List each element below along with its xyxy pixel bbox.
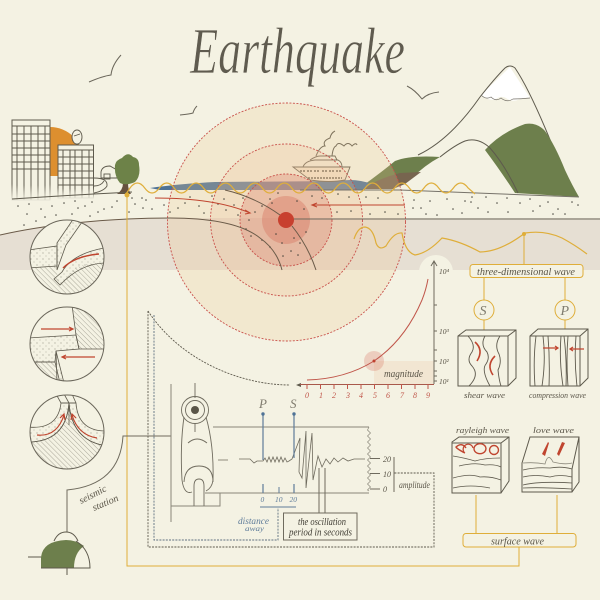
distance scale: 10 bbox=[275, 495, 283, 504]
amplitude scale: 0 bbox=[383, 485, 387, 494]
seismic waves bbox=[126, 183, 587, 255]
ground dots bbox=[18, 193, 578, 256]
magnitude curve bbox=[307, 279, 428, 380]
crust lines bbox=[0, 190, 600, 270]
birds bbox=[89, 55, 439, 115]
distance away label: distance bbox=[238, 517, 269, 527]
amplitude scale bbox=[370, 455, 430, 494]
S wave badge bbox=[474, 300, 494, 320]
snow peak bbox=[481, 67, 530, 101]
x-axis numbers bbox=[305, 391, 430, 400]
building: short bbox=[58, 145, 94, 198]
surface wave label bbox=[463, 534, 576, 548]
S wave badge: S bbox=[480, 304, 486, 319]
magnitude box bbox=[374, 361, 434, 384]
label: shear wave: shear wave bbox=[464, 390, 505, 400]
seismometer body bbox=[181, 383, 213, 506]
P wave badge bbox=[555, 300, 575, 320]
house and road bbox=[94, 166, 117, 193]
distance scale: 0 bbox=[260, 495, 264, 504]
amplitude scale: 20 bbox=[383, 455, 391, 464]
x-axis numbers: 3 bbox=[345, 391, 350, 400]
tree bbox=[115, 154, 140, 194]
x-axis numbers: 7 bbox=[400, 391, 405, 400]
x-axis numbers: 4 bbox=[359, 391, 363, 400]
wave connector lines bbox=[125, 193, 565, 566]
x-axis numbers: 0 bbox=[305, 391, 309, 400]
amplitude scale: amplitude bbox=[399, 481, 430, 491]
magnitude chart bbox=[300, 261, 450, 400]
label: rayleigh wave: rayleigh wave bbox=[456, 425, 509, 435]
distance away label: away bbox=[245, 524, 265, 533]
compression wave block bbox=[529, 329, 588, 400]
S marker: S bbox=[290, 396, 297, 411]
shear wave block bbox=[458, 330, 516, 400]
x-axis numbers: 1 bbox=[319, 391, 323, 400]
city bbox=[12, 120, 140, 200]
sun bbox=[50, 127, 80, 176]
seismic station dome bbox=[28, 532, 90, 575]
dashed signal lines bbox=[148, 311, 434, 547]
y-axis numbers: 10¹ bbox=[439, 377, 450, 386]
low green slope bbox=[358, 156, 440, 189]
P marker: P bbox=[258, 396, 267, 411]
amplitude scale: 10 bbox=[383, 470, 391, 479]
right edge bbox=[368, 427, 370, 491]
seismogram trace bbox=[218, 431, 365, 488]
focus halo bbox=[262, 196, 310, 244]
title: Earthquake bbox=[189, 15, 405, 88]
surface wave line bbox=[126, 183, 475, 194]
fault circle 3 bbox=[28, 394, 108, 470]
x-axis numbers: 8 bbox=[413, 391, 417, 400]
seismic station label: station bbox=[91, 493, 120, 514]
building: tall bbox=[12, 120, 50, 200]
connector to seismic station bbox=[67, 436, 171, 532]
rayleigh wave block bbox=[452, 425, 509, 493]
curve glow bbox=[364, 351, 384, 371]
magnitude label: magnitude bbox=[384, 369, 423, 380]
surface wave label: surface wave bbox=[491, 536, 545, 548]
y-axis numbers: 10⁴ bbox=[439, 267, 450, 276]
oscillation period box bbox=[284, 468, 357, 540]
fault circle 1 bbox=[28, 218, 104, 295]
inner wave ring bbox=[240, 174, 332, 266]
y-axis numbers: 10² bbox=[439, 357, 450, 366]
axes bbox=[300, 261, 437, 389]
x-axis numbers: 5 bbox=[373, 391, 377, 400]
green mountain bbox=[485, 124, 579, 197]
oscillation period box: period in seconds bbox=[288, 528, 352, 538]
S marker bbox=[290, 396, 297, 493]
P marker bbox=[258, 396, 267, 493]
label: love wave: love wave bbox=[533, 425, 574, 435]
mountains bbox=[358, 66, 579, 197]
y-axis numbers: 10³ bbox=[439, 327, 450, 336]
seismic station label: seismic bbox=[77, 483, 109, 507]
outer wave ring bbox=[168, 103, 406, 341]
red stress arrows bbox=[155, 198, 405, 214]
front hill bbox=[440, 140, 518, 193]
P wave badge: P bbox=[560, 304, 570, 319]
seismograph bbox=[171, 383, 430, 540]
seismic station label bbox=[77, 483, 120, 514]
fault circle 2 bbox=[28, 305, 108, 383]
sea bbox=[150, 180, 372, 190]
middle wave ring bbox=[210, 144, 362, 296]
x-axis numbers: 6 bbox=[386, 391, 390, 400]
love wave block bbox=[522, 425, 579, 492]
x-axis numbers: 2 bbox=[332, 391, 336, 400]
distance scale: 20 bbox=[290, 495, 297, 504]
underground band bbox=[0, 218, 600, 270]
label: compression wave: compression wave bbox=[529, 390, 586, 400]
shock wave circles bbox=[168, 103, 406, 341]
deep wave line bbox=[354, 227, 587, 255]
distance scale bbox=[260, 487, 297, 507]
focus bbox=[278, 212, 294, 228]
graph top disc bbox=[419, 255, 453, 289]
distance away label bbox=[238, 517, 269, 533]
oscillation period box: the oscillation bbox=[298, 517, 346, 528]
pillar and base bbox=[171, 384, 369, 522]
y-axis numbers bbox=[439, 267, 450, 386]
three-dimensional wave label: three-dimensional wave bbox=[477, 267, 575, 278]
ship bbox=[293, 131, 357, 182]
x-axis numbers: 9 bbox=[426, 391, 430, 400]
satellite dish bbox=[72, 130, 82, 145]
